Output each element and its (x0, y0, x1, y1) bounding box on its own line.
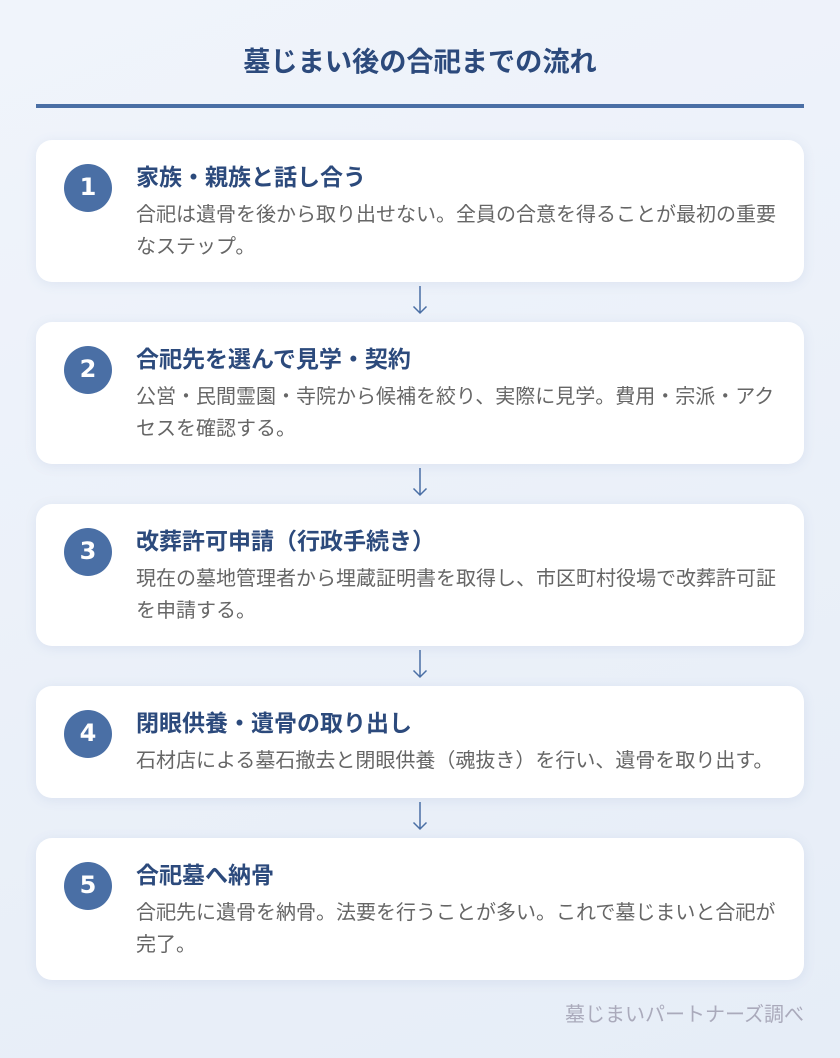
step 5 description: 合祀先に遺骨を納骨。法要を行うことが多い。これで墓じまいと合祀が完了。 (136, 896, 775, 957)
panel: step 5 (36, 838, 804, 980)
step 5 number (64, 862, 112, 910)
step 1 description: 合祀は遺骨を後から取り出せない。全員の合意を得ることが最初の重要なステップ。 (136, 198, 776, 259)
step 3 description: 現在の墓地管理者から埋蔵証明書を取得し、市区町村役場で改葬許可証を申請する。 (136, 562, 776, 623)
step 3 number: 3 (80, 537, 96, 565)
step 1 heading: 家族・親族と話し合う (136, 158, 366, 192)
arrow: step 1 to 2 (413, 286, 427, 314)
source note: 墓じまいパートナーズ調べ (565, 998, 804, 1027)
step 2 heading: 合祀先を選んで見学・契約 (136, 340, 411, 374)
arrow: step 4 to 5 (413, 802, 427, 830)
step 4 heading: 閉眼供養・遺骨の取り出し (136, 704, 412, 738)
panel: step 4 (36, 686, 804, 798)
step 3 heading: 改葬許可申請（行政手続き） (136, 522, 435, 556)
step 1 number (64, 164, 112, 212)
arrow: step 2 to 3 (413, 468, 427, 496)
step 2 number: 2 (80, 355, 96, 383)
step 1 number: 1 (80, 173, 96, 201)
step 2 description: 公営・民間霊園・寺院から候補を絞り、実際に見学。費用・宗派・アクセスを確認する。 (136, 380, 774, 441)
arrow: step 3 to 4 (413, 650, 427, 678)
panel: step 2 (36, 322, 804, 464)
step 4 number (64, 710, 112, 758)
title: 墓じまい後の合祀までの流れ (243, 39, 597, 79)
step 4 number: 4 (80, 719, 96, 747)
panel: step 3 (36, 504, 804, 646)
panel: step 1 (36, 140, 804, 282)
step 5 heading: 合祀墓へ納骨 (136, 856, 274, 890)
step 4 description: 石材店による墓石撤去と閉眼供養（魂抜き）を行い、遺骨を取り出す。 (136, 744, 773, 773)
step 5 number: 5 (80, 871, 96, 899)
step 2 number (64, 346, 112, 394)
step 3 number (64, 528, 112, 576)
